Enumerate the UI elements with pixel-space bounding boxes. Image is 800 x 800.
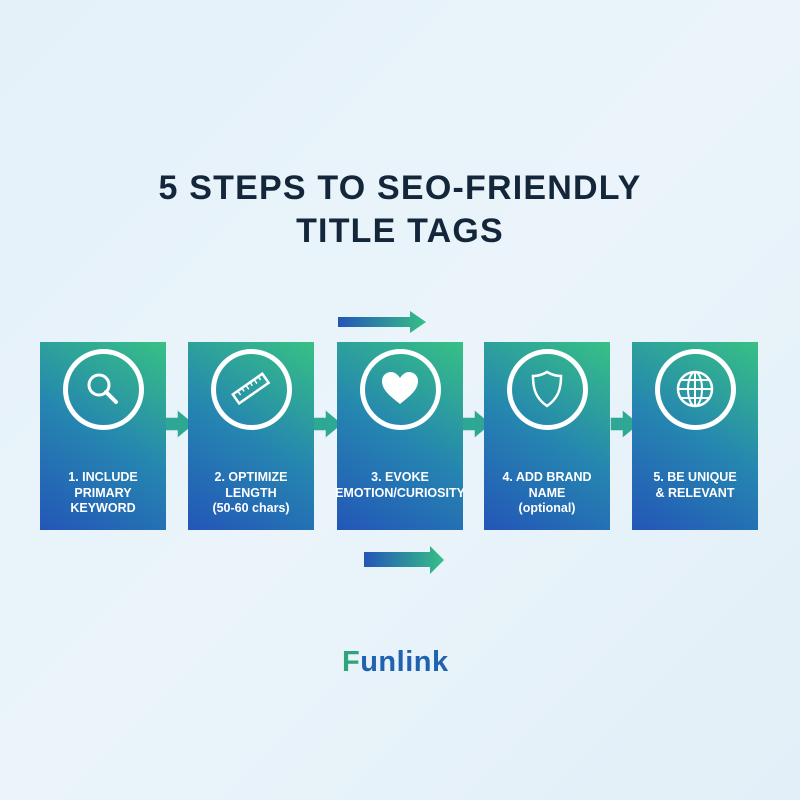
text: step 2: LENGTH [225,486,277,500]
title: 5 STEPS TO SEO-FRIENDLY [159,169,641,207]
icon: magnifier [63,349,144,430]
text: step 1: KEYWORD [70,501,136,515]
panel: step 5 [632,342,758,530]
arrow: top [338,311,426,333]
text: step 2 [212,470,290,515]
icon: heart [360,349,441,430]
text: step 2: 2. OPTIMIZE [215,470,287,484]
arrow: bottom [364,546,444,574]
text: step 4: NAME [529,486,565,500]
text: step 5: & RELEVANT [656,486,734,500]
panel: step 1 [40,342,166,530]
icon: globe [655,349,736,430]
icon: ruler [211,349,292,430]
text: step 5 [653,470,737,500]
text: step 4 [502,470,592,515]
logo: Funlink [342,646,449,678]
panel: step 3 [337,342,463,530]
icon: shield [507,349,588,430]
text: step 3: 3. EVOKE [371,470,429,484]
text: step 5: 5. BE UNIQUE [653,470,737,484]
connector arrows [166,410,632,438]
text: step 3: EMOTION/CURIOSITY [335,486,465,500]
text: step 4: (optional) [519,501,575,515]
title [159,169,641,250]
text: step 1: 1. INCLUDE [68,470,138,484]
text: step 1 [68,470,138,515]
title: TITLE TAGS [296,212,504,250]
text: step 2: (50-60 chars) [212,501,290,515]
panel: step 4 [484,342,610,530]
text: step 4: 4. ADD BRAND [502,470,592,484]
text: step 3 [335,470,465,500]
panel: step 2 [188,342,314,530]
text: step 1: PRIMARY [74,486,132,500]
